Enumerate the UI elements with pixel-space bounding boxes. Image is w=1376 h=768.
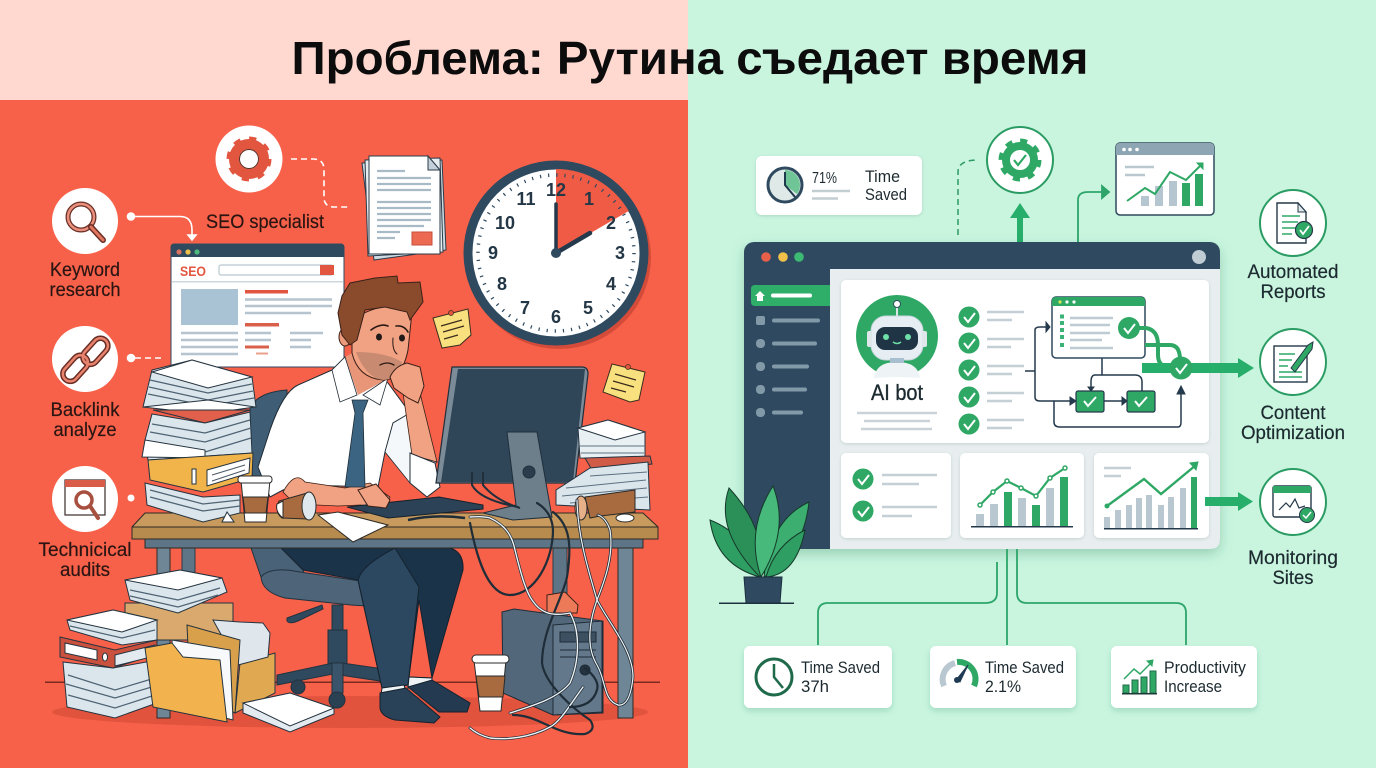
chart window [1116,143,1214,215]
ear [339,328,351,346]
label: Backlink analyze: analyze [54,420,116,441]
yellow binder [148,453,253,492]
loose papers [243,693,334,732]
connector: audit dot [128,494,134,502]
face details [371,325,408,365]
chair back [250,390,287,492]
connectors to metric cards [818,549,1186,645]
panel: problem background [0,100,688,768]
metric card: time saved 37h: Time Saved [801,658,880,677]
label: AI bot: AI bot [871,380,923,405]
folder and box [145,620,275,722]
wall clock: 2 [606,213,616,233]
metric card: productivity increase [1111,646,1257,708]
icon: automated reports [1260,190,1326,256]
forearm left [283,478,390,507]
sticky note: left [433,309,471,348]
label: Monitoring Sites: Sites [1272,568,1314,589]
head [352,307,412,380]
arrow: to chart window [1078,186,1109,242]
paper on desk [318,512,388,542]
coffee cup: floor [472,655,509,711]
label: Automated Reports: Reports [1260,282,1326,303]
computer tower [502,609,603,715]
browser window: SEO page: SEO [180,263,206,279]
floor with shadow [45,682,660,728]
title: Проблема: Рутина съедает время [292,32,1088,84]
panel: growth chart [1094,453,1209,538]
arrow: keyword to browser [128,213,196,240]
label: Keyword research: research [50,280,120,301]
arrow: dashed gear to document [291,159,349,207]
tangled cables [470,500,633,739]
coffee cup: desk [238,476,272,522]
wall clock: 6 [551,307,561,327]
shirt sleeve [385,413,437,483]
label: Content Optimization: Optimization [1241,423,1345,444]
hair [338,276,423,345]
label: Technical audits [38,540,132,581]
back desk legs [182,546,567,616]
wall clock: 9 [488,243,498,263]
plant [710,486,809,604]
wall clock: 7 [520,298,530,318]
wall clock: 12 [546,180,566,200]
sleeve cuff [410,453,440,497]
chair seat [261,570,421,606]
wall clock: 8 [497,274,507,294]
wall clock [467,165,651,349]
tipped cup: right [575,490,635,522]
chair pedestal [332,605,343,632]
tie [345,400,368,487]
wall clock: 3 [615,243,625,263]
icon: content optimization [1260,329,1326,395]
icon: AI robot [856,295,938,378]
connector: backlink dashed [128,354,165,362]
label: Keyword research: Keyword [50,260,120,281]
metric card: time saved 37h [744,646,892,708]
icon: audit window in circle [52,466,118,532]
icon: chain link in circle [52,326,118,392]
window controls [761,250,1206,264]
chair base [277,663,404,685]
label: Monitoring Sites: Monitoring [1248,548,1338,569]
connector: dashed to gear [958,160,978,235]
label: Automated Reports [1248,262,1338,303]
paper stack: right desk [556,420,652,510]
panel: checklist [841,453,951,538]
arrow: up to gear [1010,203,1030,242]
man: torso, arm, head [258,276,440,507]
hand on chin [390,363,424,403]
panel: solution background [688,0,1376,768]
label: Technical audits: audits [60,560,110,581]
sticky note: right [603,364,645,402]
arrow: chart to monitoring [1205,492,1253,511]
metric card: time saved 2.1%: Time Saved [985,658,1064,677]
checklist [958,306,1024,434]
monitor [436,367,588,483]
label: Content Optimization [1241,403,1345,444]
chair lever [287,605,323,623]
document stack [362,156,446,260]
wall clock: 4 [606,274,616,294]
metric card: productivity increase: Productivity [1164,658,1246,677]
floor stack: papers and red binder [60,610,157,718]
raised forearm [403,385,437,462]
icon: magnifier in circle [52,188,118,254]
main panel: AI bot workflow [841,280,1209,443]
paper stack: left desk [142,360,256,522]
wall clock: 10 [495,213,515,233]
label: Monitoring Sites [1248,548,1338,589]
time card: 71%: Saved [865,185,907,204]
label: Keyword research [50,260,120,301]
mouse cable on desk [408,516,465,520]
desk [132,513,658,718]
wall clock: 1 [584,189,594,209]
label: Content Optimization: Content [1260,403,1326,424]
icon: gear with check [987,127,1053,193]
stubble [356,352,402,380]
icon: monitoring sites [1260,469,1326,535]
flow diagram [1025,297,1185,427]
metric card: time saved 2.1%: 2.1% [985,677,1021,696]
wall clock: 5 [583,298,593,318]
browser window: SEO page [171,244,344,367]
time card: 71%: Time [865,167,900,186]
item behind tower [547,592,578,613]
label: Backlink analyze: Backlink [50,400,120,421]
chair lower back [250,545,305,577]
wall clock: 11 [516,189,536,209]
metric card: productivity increase: Increase [1164,677,1222,696]
monitor stand [472,432,552,520]
label: Backlink analyze [50,400,120,441]
resting hand [358,484,390,508]
neck [345,353,390,395]
tipped cup: desk [277,492,316,520]
time card: 71% [756,156,922,215]
keyboard [347,497,483,518]
dashboard window [744,242,1220,549]
label: Technical audits: Technicical [38,540,132,561]
metric card: time saved 37h: 37h [801,677,829,696]
panel: bar and line chart [960,453,1084,538]
office chair [250,390,421,708]
header band: problem side [0,0,688,100]
label: SEO specialist: SEO specialist [206,212,325,233]
icon: gear in circle [216,126,282,192]
label: Automated Reports: Automated [1248,262,1338,283]
arrow: workflow to content optimization [1142,356,1254,380]
collar [332,357,388,405]
shirt [258,357,410,497]
time card: 71%: 71% [812,170,837,187]
man: legs and shoes [281,548,470,723]
sidebar [751,285,830,417]
floor stack: upper papers and carton [125,570,233,640]
metric card: time saved 2.1% [930,646,1076,708]
